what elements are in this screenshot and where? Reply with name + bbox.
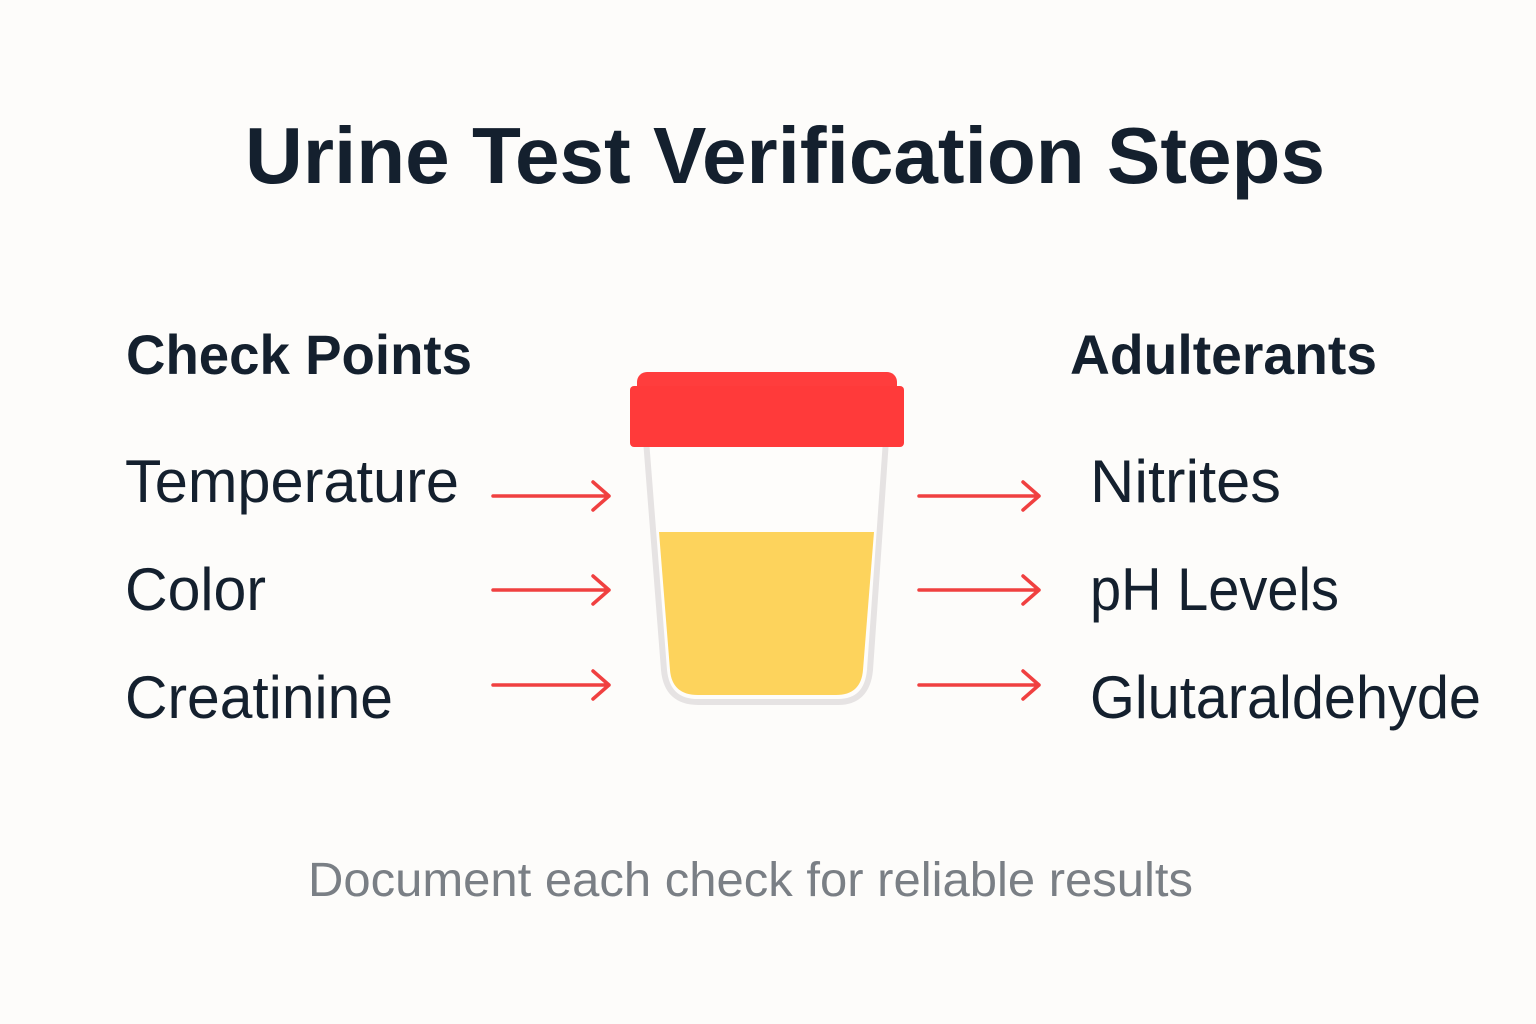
icon: specimen cup xyxy=(630,372,904,702)
list: check points: Temperature xyxy=(125,448,459,515)
title: Urine Test Verification Steps xyxy=(245,111,1325,200)
arrows: right xyxy=(919,482,1039,699)
footer text: Document each check for reliable results xyxy=(308,854,1193,907)
list: adulterants: Glutaraldehyde xyxy=(1090,664,1481,731)
list: check points: Color xyxy=(125,556,266,623)
heading: adulterants: Adulterants xyxy=(1070,323,1377,386)
list: check points xyxy=(125,448,459,731)
list: check points: Creatinine xyxy=(125,664,393,731)
list: adulterants: Nitrites xyxy=(1090,448,1281,515)
heading: check points: Check Points xyxy=(126,323,472,386)
list: adulterants: pH Levels xyxy=(1090,556,1339,623)
list: adulterants xyxy=(1090,448,1481,731)
arrows: left xyxy=(493,482,609,699)
